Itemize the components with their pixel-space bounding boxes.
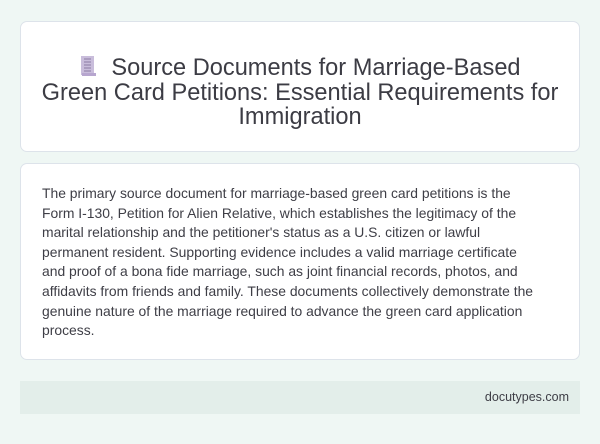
footer: docutypes.com <box>485 390 569 404</box>
text block: genuine nature of the marriage required to advance the green card application <box>42 303 522 319</box>
heading <box>42 55 558 130</box>
text block: affidavits from friends and family. These documents collectively demonstrate the <box>42 283 533 299</box>
text block: permanent resident. Supporting evidence includes a valid marriage certificate <box>42 244 517 260</box>
text block: marital relationship and the petitioner's status as a U.S. citizen or lawful <box>42 224 480 240</box>
icon: document <box>81 56 96 76</box>
text block: process. <box>42 322 94 338</box>
heading: Source Documents for Marriage-Based <box>111 55 521 81</box>
text block <box>42 185 533 338</box>
footer <box>20 381 580 414</box>
text block: Form I-130, Petition for Alien Relative, which establishes the legitimacy of the <box>42 205 516 221</box>
text block: and proof of a bona fide marriage, such as joint financial records, photos, and <box>42 263 518 279</box>
panel: description <box>20 163 580 360</box>
heading: Immigration <box>238 104 362 130</box>
panel: title <box>20 21 580 152</box>
text block: The primary source document for marriage-based green card petitions is the <box>42 185 511 201</box>
heading: Green Card Petitions: Essential Requirements for <box>42 80 558 106</box>
